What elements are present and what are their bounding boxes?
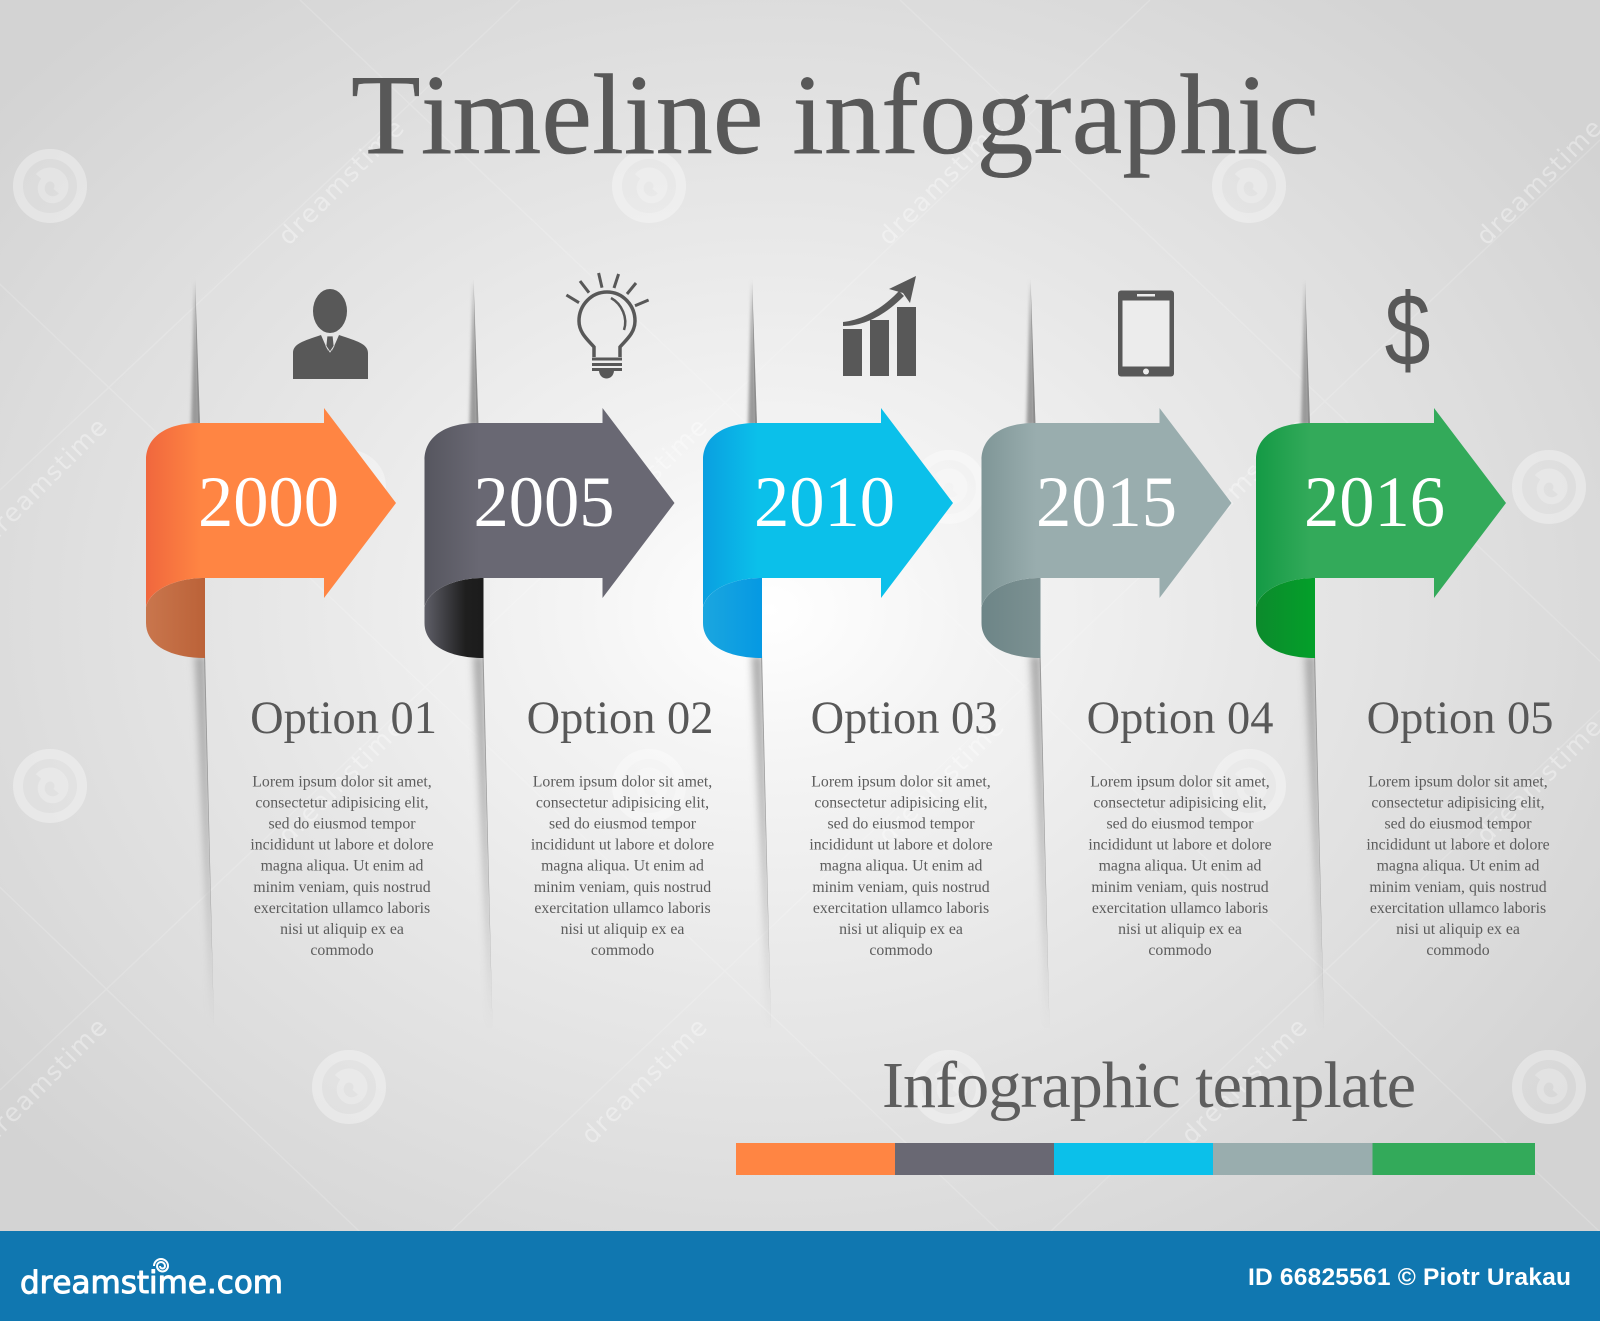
description: magna aliqua. Ut enim ad [261,858,423,875]
description: nisi ut aliquip ex ea [280,921,404,938]
ribbon arrow [424,408,674,658]
description: Lorem ipsum dolor sit amet, [252,773,432,790]
description: sed do eiusmod tempor [269,816,416,832]
icon: businessman [293,289,368,379]
panel: step 2015 [982,280,1273,1028]
description: Lorem ipsum dolor sit amet, [1368,773,1548,790]
ribbon arrow [982,408,1232,658]
watermark text: dreamstime [575,1012,713,1150]
footer credit: ID 66825561 © Piotr Urakau [1248,1264,1571,1291]
option heading: Option 05 [1367,693,1553,744]
description: sed do eiusmod tempor [549,816,697,832]
colour legend bar [736,1143,1535,1175]
description: consectetur adipisicing elit, [255,794,429,811]
year: 2015 [1036,462,1177,542]
watermark text: dreamstime [575,412,713,550]
year: 2000 [198,462,339,542]
description: commodo [1426,942,1490,959]
icon: light bulb [566,273,649,378]
description: commodo [869,942,933,959]
watermark text: dreamstime [272,712,410,850]
description: incididunt ut labore et dolore [531,837,714,854]
description: commodo [310,942,374,959]
description: exercitation ullamco laboris [813,900,989,917]
watermark text: dreamstime [1175,412,1313,550]
description: exercitation ullamco laboris [1092,900,1268,917]
panel: step 2010 [703,276,997,1028]
description: incididunt ut labore et dolore [809,837,993,854]
watermark text [0,113,1600,1150]
option heading: Option 01 [250,693,437,744]
description: minim veniam, quis nostrud [253,879,431,896]
panel: step 2000 [146,280,437,1028]
description: sed do eiusmod tempor [1385,816,1532,832]
description: magna aliqua. Ut enim ad [541,858,704,875]
watermark text: dreamstime [272,113,410,251]
paper slit [1301,280,1324,1028]
option heading: Option 03 [811,693,997,744]
description: commodo [1148,942,1212,959]
footer band [0,1231,1600,1321]
icon: dollar sign: $ [1385,273,1430,388]
description: incididunt ut labore et dolore [250,837,434,854]
description: Lorem ipsum dolor sit amet, [533,773,712,790]
icon: growth chart [843,276,916,376]
ribbon arrow [146,408,396,658]
description: minim veniam, quis nostrud [1091,879,1269,896]
description: nisi ut aliquip ex ea [1396,921,1520,938]
description: incididunt ut labore et dolore [1088,837,1272,854]
ribbon arrow [703,408,953,658]
description: Lorem ipsum dolor sit amet, [1090,773,1270,790]
description: consectetur adipisicing elit, [1371,794,1545,811]
footer logo: dreamstime.com [20,1265,283,1301]
ribbon arrow [1256,408,1506,658]
description: incididunt ut labore et dolore [1366,837,1550,854]
icon: tablet [1118,290,1174,376]
paper slit [1026,280,1050,1028]
panel: step 2016 [1256,273,1553,1028]
option heading: Option 04 [1087,693,1273,744]
paper slit [470,280,492,1028]
year: 2005 [473,462,615,542]
title: Timeline infographic [351,51,1319,178]
option heading: Option 02 [527,693,713,744]
paper slit [748,280,771,1028]
watermark spirals [13,149,1586,1124]
watermark text: dreamstime [872,712,1010,850]
year: 2010 [754,462,895,542]
description: sed do eiusmod tempor [1107,816,1254,832]
description: consectetur adipisicing elit, [536,794,709,811]
description: consectetur adipisicing elit, [814,794,988,811]
description: magna aliqua. Ut enim ad [1377,858,1539,875]
description: minim veniam, quis nostrud [812,879,990,896]
description: commodo [591,942,654,959]
description: nisi ut aliquip ex ea [1118,921,1242,938]
subtitle: Infographic template [882,1049,1416,1122]
watermark text: dreamstime [872,113,1010,251]
logo spiral [154,1259,168,1272]
description: sed do eiusmod tempor [828,816,975,832]
paper slit [191,280,214,1028]
description: exercitation ullamco laboris [254,900,430,917]
description: exercitation ullamco laboris [534,900,711,917]
description: magna aliqua. Ut enim ad [1099,858,1261,875]
panel: step 2005 [424,273,714,1028]
description: magna aliqua. Ut enim ad [820,858,982,875]
watermark text: dreamstime [1175,1012,1313,1150]
year: 2016 [1304,462,1445,542]
description: minim veniam, quis nostrud [534,879,711,896]
description: nisi ut aliquip ex ea [839,921,963,938]
description: minim veniam, quis nostrud [1369,879,1547,896]
description: Lorem ipsum dolor sit amet, [811,773,991,790]
description: exercitation ullamco laboris [1370,900,1546,917]
description: nisi ut aliquip ex ea [561,921,684,938]
description: consectetur adipisicing elit, [1093,794,1267,811]
